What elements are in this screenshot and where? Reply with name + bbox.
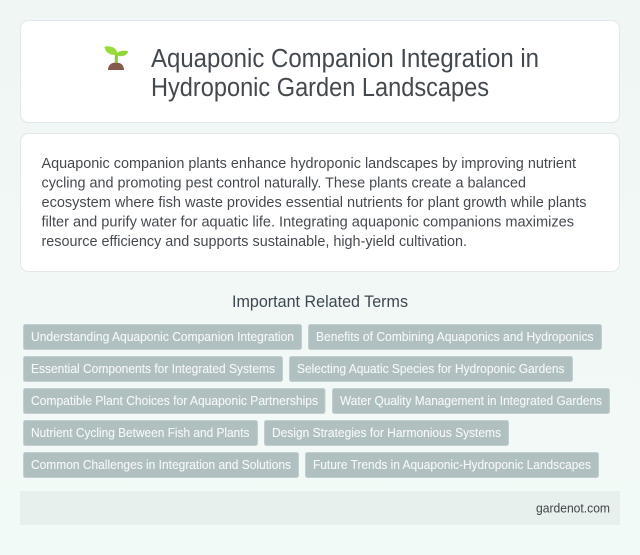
tag — [332, 388, 610, 414]
footer bar — [20, 491, 620, 525]
panel: description card — [20, 134, 620, 272]
text block: description: filter and purify water for aquatic life. Integrating aquaponic companions maximizes — [42, 214, 574, 230]
icon: seedling — [104, 46, 128, 70]
tag: Compatible Plant Choices for Aquaponic Partnerships — [31, 393, 318, 408]
tag: Water Quality Management in Integrated Gardens — [340, 393, 602, 408]
panel: header card — [20, 20, 620, 122]
tag — [308, 324, 602, 350]
tag: Understanding Aquaponic Companion Integration — [31, 329, 294, 344]
tag — [24, 388, 325, 414]
title: Aquaponic Companion Integration in — [151, 45, 539, 73]
tag: Future Trends in Aquaponic-Hydroponic Landscapes — [313, 457, 591, 472]
tag: Essential Components for Integrated Systems — [31, 361, 275, 376]
text block: description — [42, 156, 586, 250]
text block: description: Aquaponic companion plants enhance hydroponic landscapes by improving nutrient — [42, 156, 576, 172]
text block: description: ecosystem where fish waste provides essential nutrients for plant growth while plants — [42, 195, 586, 211]
text block: description: resource efficiency and supports sustainable, high-yield cultivation. — [42, 234, 467, 250]
title — [151, 45, 539, 102]
tag — [24, 324, 302, 350]
footer: site name: gardenot.com — [536, 500, 610, 516]
title: Hydroponic Garden Landscapes — [151, 74, 489, 102]
tag: Nutrient Cycling Between Fish and Plants — [31, 425, 250, 440]
heading: important related terms: Important Related Terms — [232, 293, 408, 311]
tag: Benefits of Combining Aquaponics and Hydroponics — [316, 329, 594, 344]
tag — [264, 420, 508, 446]
tag: Design Strategies for Harmonious Systems — [272, 425, 501, 440]
tag — [24, 356, 282, 382]
panel: related term tags — [24, 324, 610, 478]
tag — [24, 452, 298, 478]
tag: Common Challenges in Integration and Solutions — [31, 457, 291, 472]
tag: Selecting Aquatic Species for Hydroponic Gardens — [297, 361, 564, 376]
tag — [24, 420, 258, 446]
tag — [290, 356, 572, 382]
text block: description: cycling and promoting pest control naturally. These plants create a balanced — [42, 176, 526, 192]
tag — [306, 452, 598, 478]
